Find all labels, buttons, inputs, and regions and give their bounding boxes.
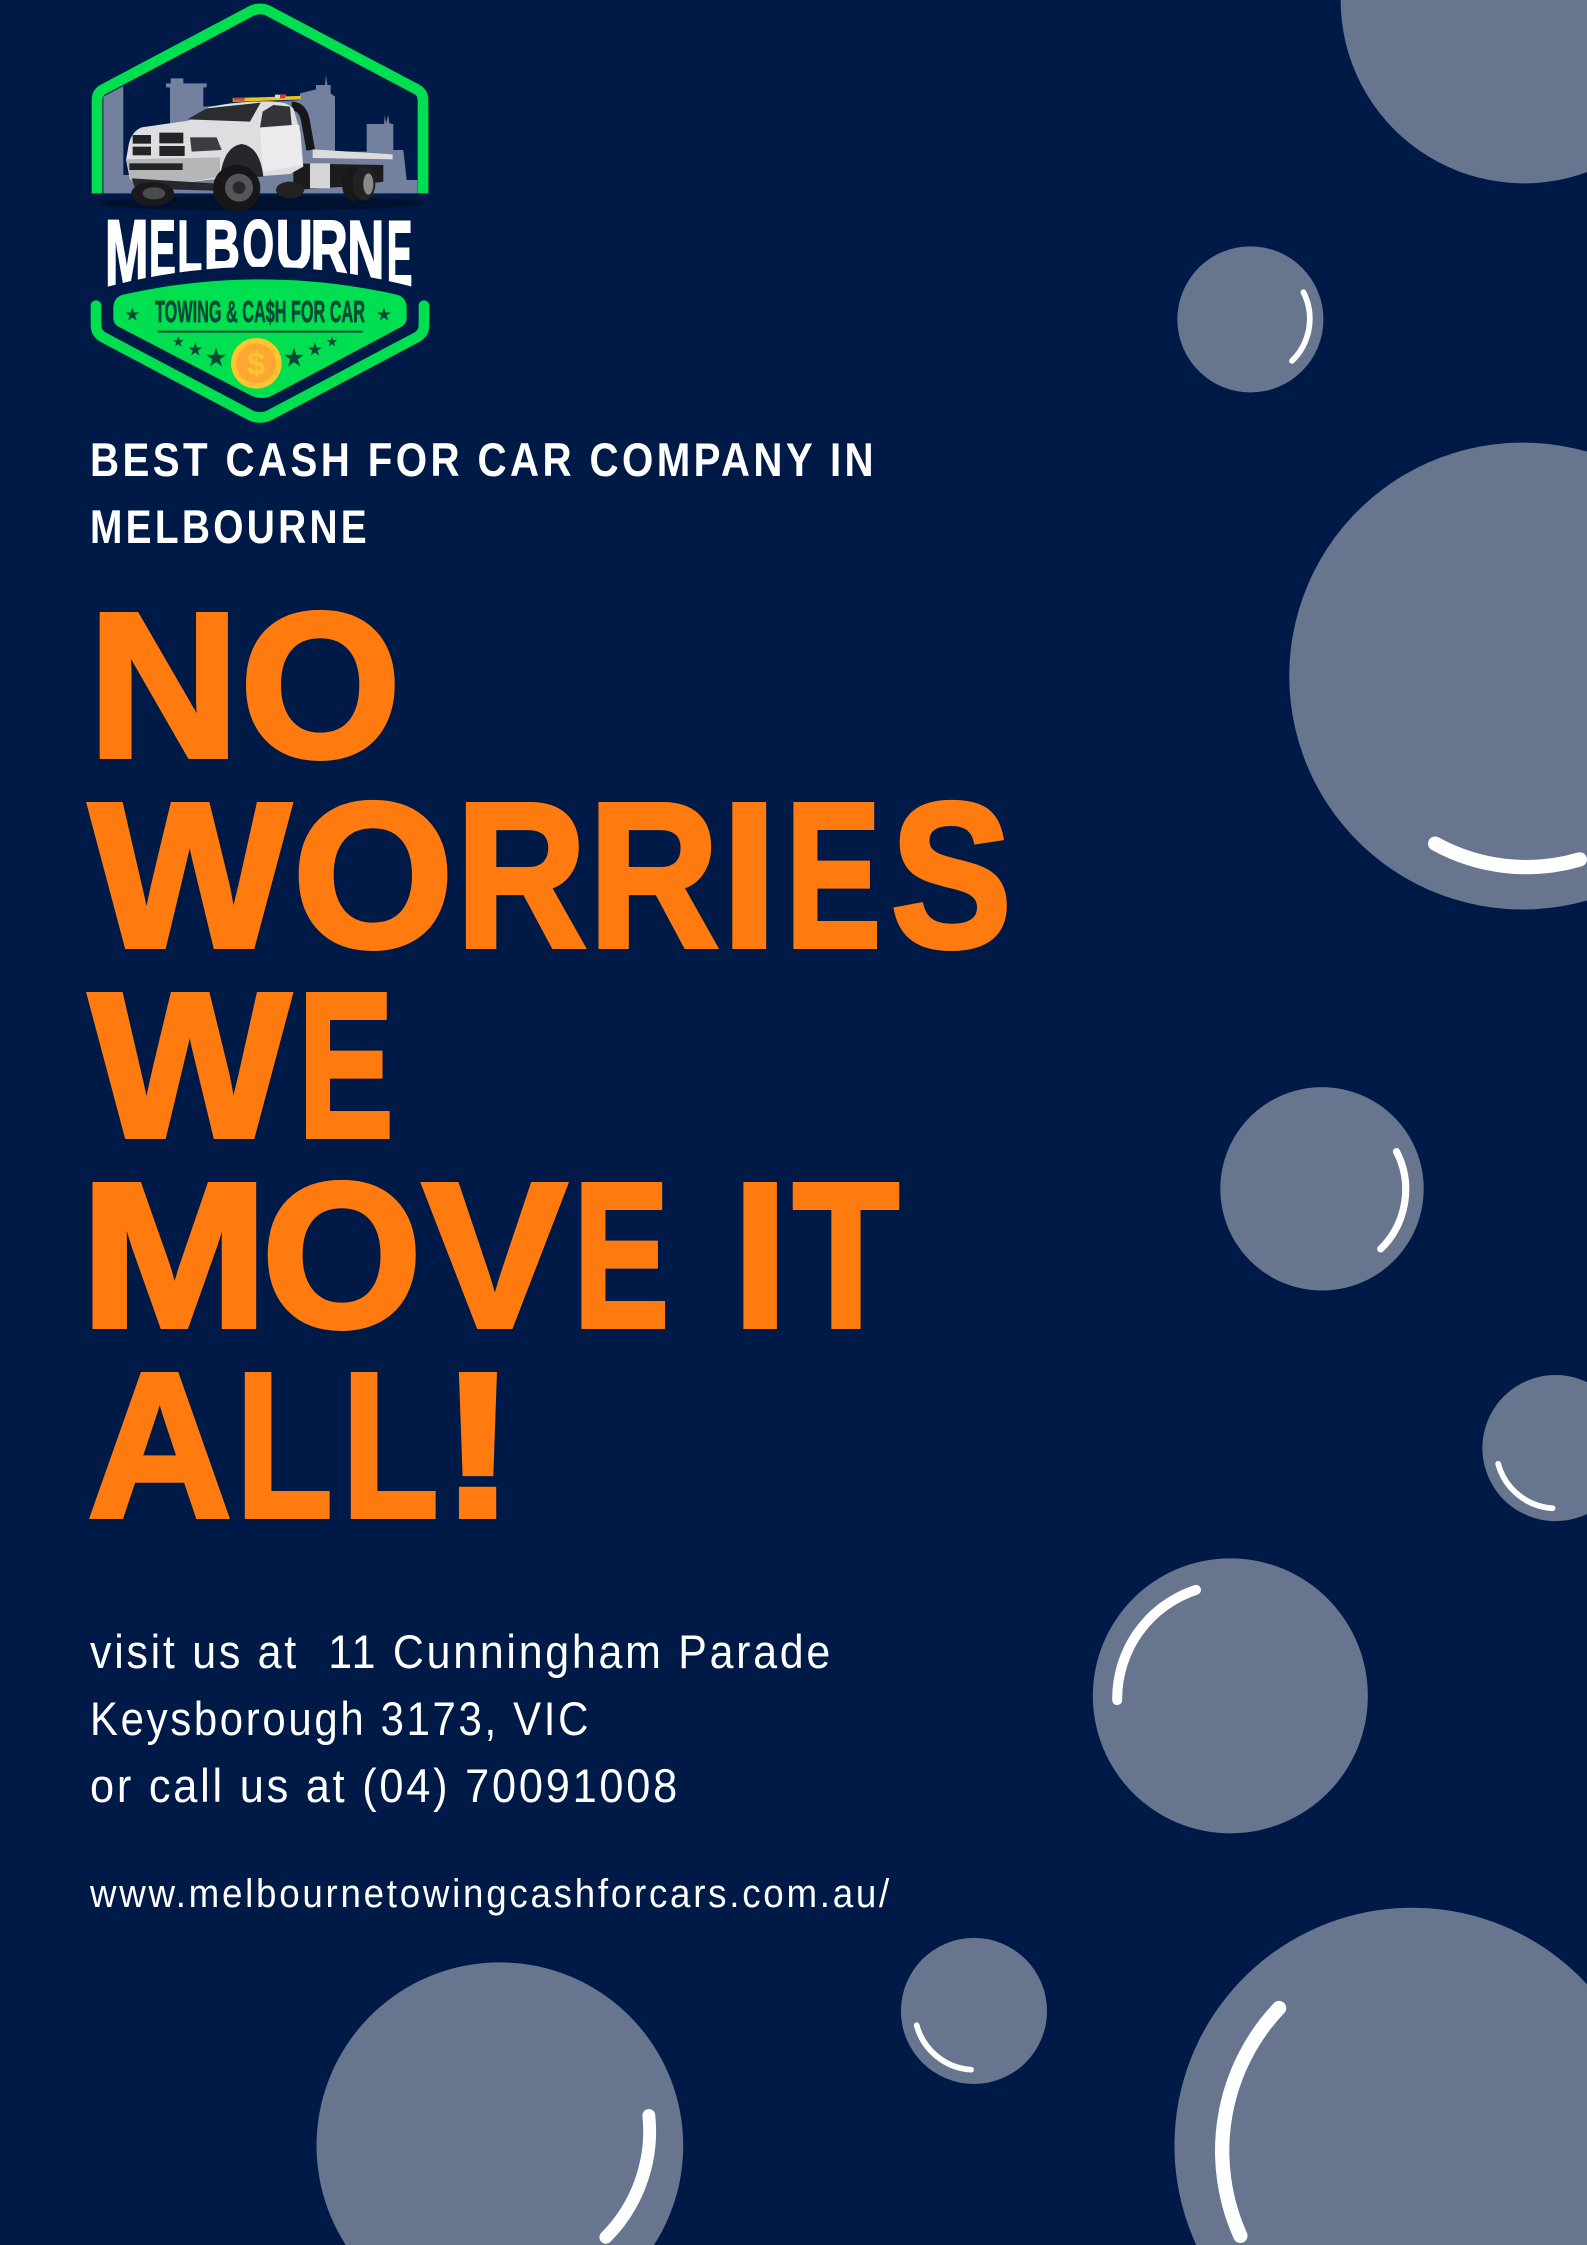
headline: I xyxy=(732,1140,788,1370)
right front wheel xyxy=(213,165,260,212)
windshield xyxy=(187,103,261,122)
headline xyxy=(80,570,1012,1560)
contact details: visit us at 11 Cunningham Parade xyxy=(90,1625,833,1678)
wordmark arc cut xyxy=(100,267,420,302)
headline: ! xyxy=(440,1330,516,1560)
stars: ★ xyxy=(172,335,185,351)
toolbox xyxy=(310,163,330,188)
headline: W xyxy=(89,950,291,1180)
stars: ★ xyxy=(187,340,203,361)
green banner xyxy=(113,279,407,398)
melbourne wordmark: L xyxy=(177,204,202,288)
subheading: BEST CASH FOR CAR COMPANY IN xyxy=(90,434,877,487)
stars: ★ xyxy=(376,305,392,326)
headline: N xyxy=(88,570,240,800)
bubble: lower medium xyxy=(1093,1558,1368,1833)
hexagon frame top xyxy=(97,9,423,193)
coin xyxy=(231,338,282,389)
lower frame xyxy=(132,178,213,191)
stars: ★ xyxy=(204,343,228,373)
headline: L xyxy=(236,1330,333,1560)
tow rack xyxy=(292,106,311,150)
contact details: Keysborough 3173, VIC xyxy=(90,1692,591,1745)
headline: M xyxy=(80,1140,269,1370)
headline: O xyxy=(262,1140,422,1370)
fender arch xyxy=(220,144,263,178)
banner text: TOWING & CA$H FOR CAR xyxy=(155,295,365,329)
melbourne wordmark: U xyxy=(276,206,313,284)
ground shadow xyxy=(97,196,423,211)
flatbed xyxy=(313,149,393,159)
melbourne wordmark: E xyxy=(149,204,176,295)
stars: ★ xyxy=(124,305,140,326)
headline: E xyxy=(574,1140,669,1370)
chevron frame bottom xyxy=(96,306,424,417)
truck xyxy=(97,94,423,212)
brand name xyxy=(100,201,420,308)
contact details: or call us at (04) 70091008 xyxy=(90,1759,680,1812)
bumper xyxy=(126,157,220,183)
skyline xyxy=(103,75,417,193)
headline: W xyxy=(89,760,291,990)
bumper slot xyxy=(129,163,183,170)
headline: A xyxy=(88,1330,232,1560)
banner rule xyxy=(158,331,363,333)
left front wheel xyxy=(131,182,174,206)
bubble: edge right xyxy=(1482,1375,1587,1521)
melbourne wordmark: M xyxy=(105,202,149,308)
melbourne wordmark: R xyxy=(311,205,348,290)
headline: T xyxy=(793,1140,899,1370)
side window xyxy=(260,105,292,127)
stars: ★ xyxy=(282,343,306,373)
grille xyxy=(133,133,185,156)
bubble: top right xyxy=(1341,0,1587,183)
bubble: bottom center xyxy=(317,1962,683,2245)
light bar xyxy=(233,94,301,102)
headlight xyxy=(190,137,222,152)
stars: ★ xyxy=(326,335,338,351)
subheading xyxy=(90,434,877,554)
bubble: small upper xyxy=(1177,246,1323,392)
bubble: small bottom xyxy=(901,1938,1047,2084)
bubble: medium right xyxy=(1220,1087,1424,1291)
melbourne wordmark: O xyxy=(243,207,274,282)
melbourne wordmark: N xyxy=(347,202,384,297)
door highlight xyxy=(260,125,302,172)
chassis xyxy=(293,163,383,190)
headline: O xyxy=(293,760,454,990)
subheading: MELBOURNE xyxy=(90,501,370,554)
brand name: E xyxy=(387,201,412,307)
headline: R xyxy=(589,760,719,990)
logo xyxy=(96,9,424,417)
rear wheels xyxy=(342,166,375,201)
cab and hood xyxy=(126,101,303,183)
bubble: bottom right xyxy=(1174,1908,1587,2245)
stars: ★ xyxy=(307,340,323,361)
headline: R xyxy=(456,760,586,990)
bubble: large right xyxy=(1289,443,1587,910)
stars xyxy=(124,305,392,373)
headline: S xyxy=(891,760,1012,990)
headline: I xyxy=(721,760,777,990)
coin: $ xyxy=(247,346,265,382)
headline: L xyxy=(342,1330,439,1560)
headline: E xyxy=(786,760,881,990)
melbourne wordmark: B xyxy=(204,205,240,284)
website: www.melbournetowingcashforcars.com.au/ xyxy=(89,1872,892,1916)
headline: O xyxy=(240,570,401,800)
headline: E xyxy=(298,950,394,1180)
headline: V xyxy=(422,1140,567,1370)
contact details xyxy=(90,1625,833,1812)
rear far wheel xyxy=(276,182,304,198)
